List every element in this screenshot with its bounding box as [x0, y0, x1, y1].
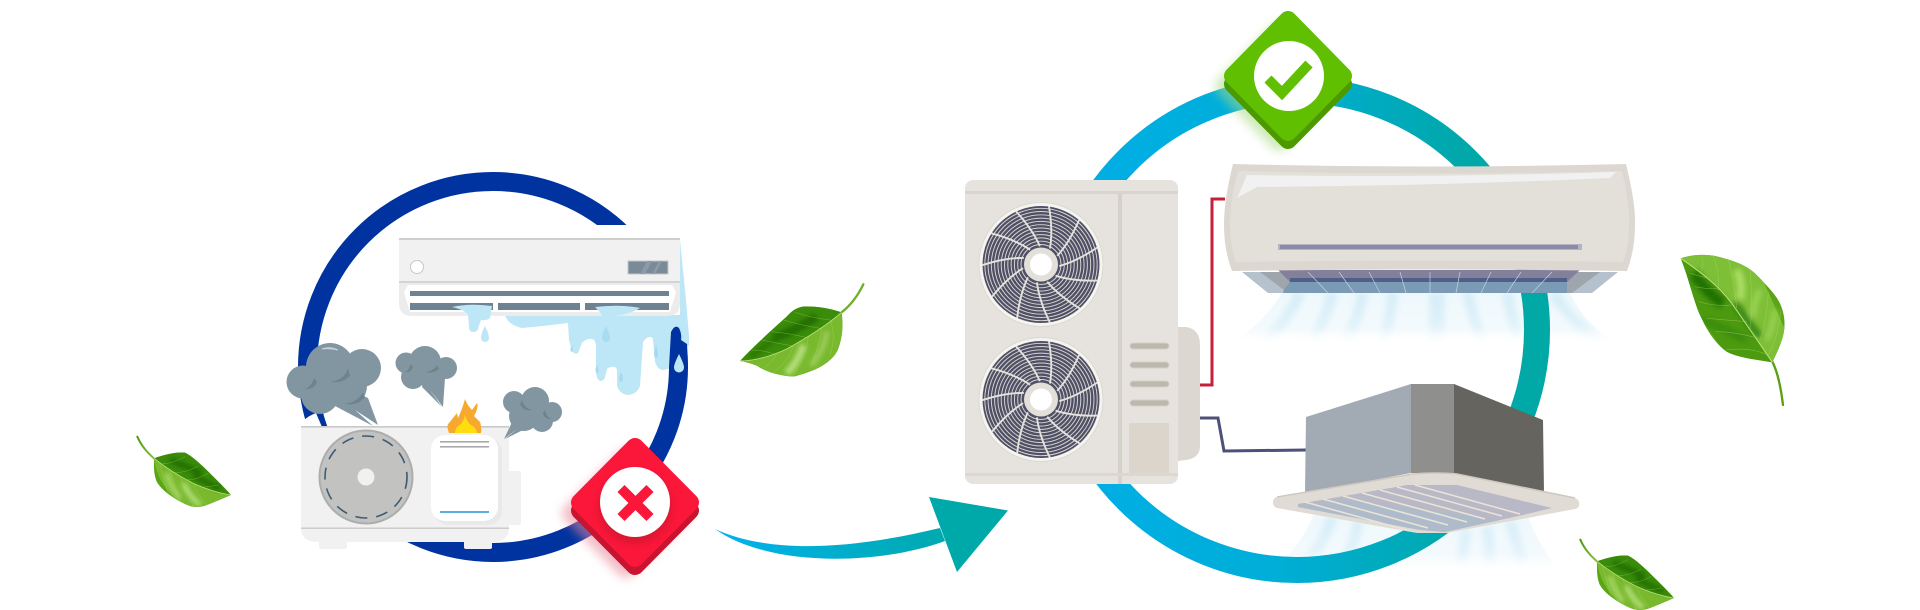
- leaf lower right: [1580, 540, 1676, 610]
- fan top: [979, 202, 1103, 326]
- airflow from ceiling cassette: [1285, 513, 1560, 572]
- panel: ceiling cassette unit: [1273, 384, 1579, 533]
- fan bottom: [979, 338, 1103, 462]
- ring: working system circle: [1057, 90, 1537, 570]
- ring tip running over the water: [669, 327, 688, 385]
- smoke cloud middle: [396, 346, 457, 407]
- leaf centre: [737, 284, 863, 380]
- smoke cloud left: [286, 343, 381, 426]
- icon: water drop on ring: [674, 354, 684, 372]
- leaf far left: [137, 437, 233, 512]
- airflow from wall unit: [1230, 293, 1617, 344]
- icon: red cross diamond: [571, 447, 690, 569]
- water drips over vent: [452, 305, 640, 342]
- panel: faulty outdoor unit: [301, 426, 521, 549]
- panel: faulty wall-mounted indoor unit: [399, 238, 680, 316]
- vent slots: [1130, 343, 1169, 406]
- white gap in ring beside outdoor unit: [303, 413, 322, 427]
- smoke cloud right: [503, 387, 562, 439]
- leaf large right: [1677, 250, 1790, 405]
- red refrigerant pipe: [1200, 199, 1225, 385]
- water leak running beneath the indoor unit: [505, 240, 689, 395]
- icon: flame: [448, 399, 481, 433]
- panel: wall-mounted indoor unit: [1224, 164, 1635, 293]
- ring: faulty system circle: [308, 182, 678, 552]
- icon: green check diamond: [1224, 20, 1343, 142]
- arrow: from faulty to working system: [715, 497, 1008, 572]
- blue refrigerant pipe: [1200, 418, 1306, 451]
- panel: outdoor unit with twin fans: [965, 180, 1200, 484]
